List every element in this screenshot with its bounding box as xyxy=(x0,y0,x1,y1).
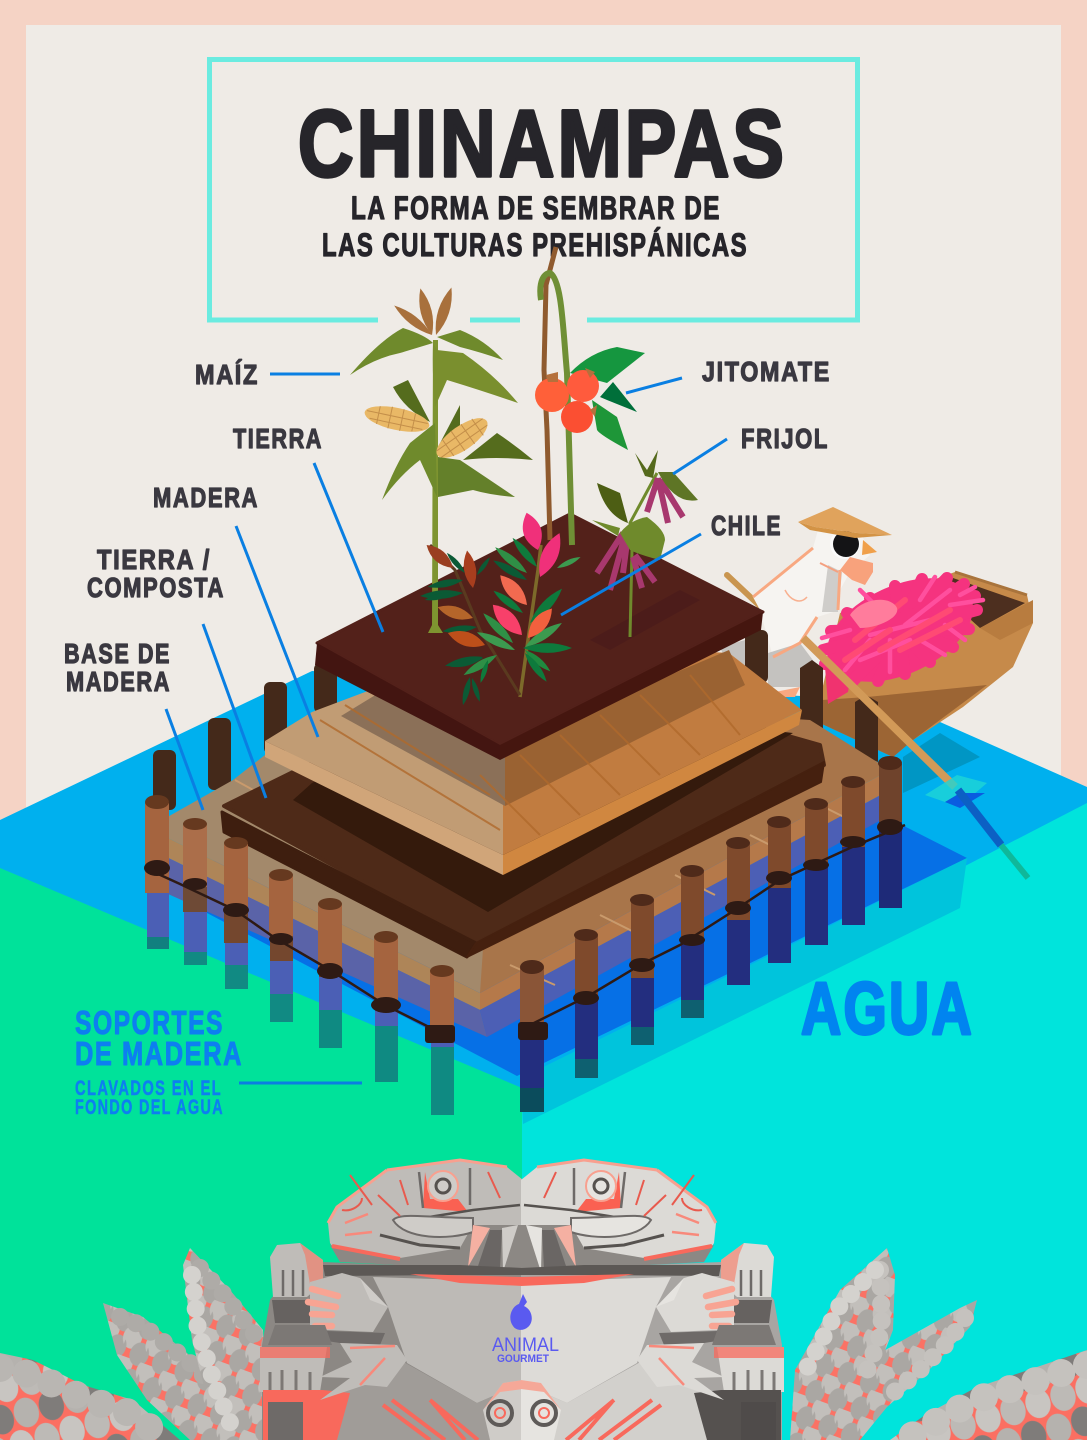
label: madera: MADERA xyxy=(153,482,259,513)
label: maíz: MAÍZ xyxy=(195,359,259,390)
grey shadow under top layer xyxy=(720,640,745,685)
front poles: left row xyxy=(145,795,454,1115)
inner cream panel xyxy=(26,25,1061,895)
label: base de madera: MADERA xyxy=(66,666,171,697)
plant: bean xyxy=(592,450,698,637)
label: tierra xyxy=(233,423,383,632)
panel: madera xyxy=(265,640,802,875)
icon: chicken rower xyxy=(727,507,892,697)
panel: tierra xyxy=(315,514,763,760)
label: soportes de madera: CLAVADOS EN EL xyxy=(75,1077,222,1100)
subtitle: LA FORMA DE SEMBRAR DE xyxy=(351,190,721,226)
label: jitomate xyxy=(626,356,831,393)
plant: chile xyxy=(420,510,582,706)
label: frijol xyxy=(673,423,829,474)
label: agua: AGUA xyxy=(801,967,974,1050)
subtitle: LAS CULTURAS PREHISPÁNICAS xyxy=(322,227,748,263)
logo: animal gourmet: ANIMAL xyxy=(492,1335,559,1356)
front poles: right row xyxy=(520,756,902,1112)
label: tierra: TIERRA xyxy=(233,423,323,454)
label: soportes de madera xyxy=(75,1004,362,1119)
label: chile: CHILE xyxy=(711,510,782,541)
title box xyxy=(210,60,858,320)
label: chile xyxy=(561,510,782,615)
logo: animal gourmet: GOURMET xyxy=(497,1353,549,1365)
label: tierra / composta xyxy=(87,544,266,798)
ropes xyxy=(144,819,905,1043)
label: base de madera xyxy=(64,638,203,810)
label: soportes de madera: SOPORTES xyxy=(75,1004,224,1041)
panel: tierra / composta xyxy=(222,660,824,957)
panel: base de madera xyxy=(148,700,890,1037)
icon: pink flowers xyxy=(811,557,989,704)
plant: maize xyxy=(350,286,533,633)
logo: animal gourmet xyxy=(492,1294,559,1365)
sculpture xyxy=(260,1160,784,1440)
label: base de madera: BASE DE xyxy=(64,638,171,669)
label: jitomate: JITOMATE xyxy=(702,356,831,387)
title: CHINAMPAS xyxy=(298,91,787,197)
label: tierra / composta: COMPOSTA xyxy=(87,572,225,603)
corn cobs xyxy=(0,1248,1087,1440)
oar xyxy=(803,638,1028,878)
panel: water xyxy=(0,671,1087,1440)
label: soportes de madera: DE MADERA xyxy=(75,1035,243,1072)
back poles xyxy=(153,630,878,810)
label: madera xyxy=(153,482,318,737)
label: frijol: FRIJOL xyxy=(741,423,829,454)
plant: tomato xyxy=(535,247,645,545)
subtitle xyxy=(322,190,748,263)
label: tierra / composta: TIERRA / xyxy=(97,544,211,575)
label: soportes de madera: FONDO DEL AGUA xyxy=(75,1096,224,1119)
boat xyxy=(822,572,1033,757)
